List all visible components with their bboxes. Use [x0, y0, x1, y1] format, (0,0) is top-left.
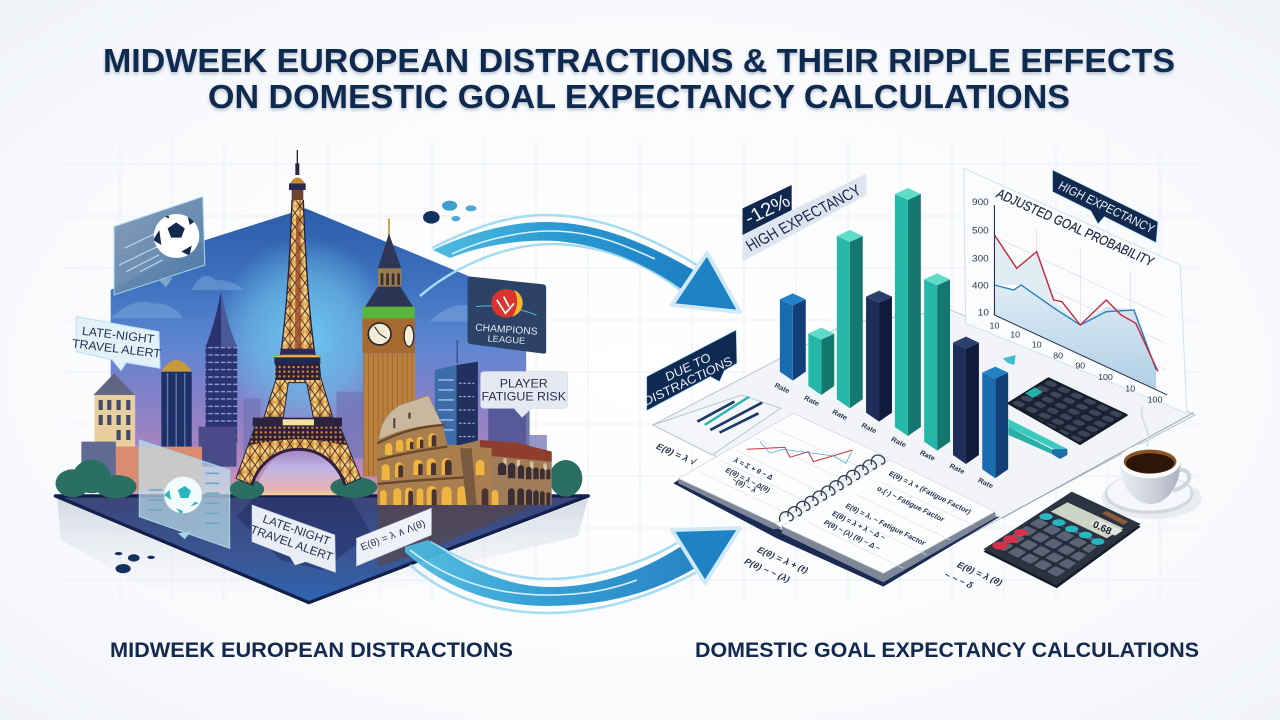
desk front edge — [1002, 413, 1193, 518]
panel: European landmarks illustration — [56, 150, 588, 607]
chart title: ADJUSTED GOAL PROBABILITY — [994, 186, 1157, 269]
handwritten formulas — [724, 455, 973, 553]
dark tower with gold dome — [161, 360, 192, 447]
panel: domestic goal expectancy desk illustration — [641, 168, 1202, 591]
formula notes on desk: E(θ) = λ + (t) — [756, 545, 810, 575]
bar axis labels — [773, 382, 994, 490]
formula notes on desk: P(θ) ~ ~ (λ) — [743, 556, 791, 584]
handwritten formulas: λ = Σ + θ ~ Δ — [732, 455, 774, 482]
notebook mini line chart — [747, 447, 853, 462]
bar axis labels: Rate — [860, 422, 878, 435]
x axis labels: 100 — [1148, 395, 1163, 405]
right ruined section — [453, 440, 552, 505]
x axis labels: 10 — [1125, 384, 1136, 393]
callout: late-night travel alert lower — [248, 505, 340, 572]
title: ON DOMESTIC GOAL EXPECTANCY CALCULATIONS — [208, 78, 1070, 115]
callout: -12% high expectancy — [741, 173, 866, 262]
arrow: bottom curved blue arrow — [405, 528, 740, 613]
bar chart — [773, 188, 1008, 490]
dark arch shadows — [398, 435, 488, 505]
floor reflection — [57, 498, 588, 607]
callout: Champions League badge — [468, 277, 546, 354]
card: glass football — [139, 440, 230, 548]
callout: due to distractions: DUE TO — [662, 351, 714, 384]
handwritten formulas: E(θ) = λ₁ ~ Fatigue Factor — [844, 501, 928, 548]
notebook — [673, 413, 1000, 587]
y axis labels: 500 — [972, 226, 989, 236]
bar axis labels: Rate — [918, 450, 936, 462]
callout: late-night travel alert top: LATE-NIGHT — [81, 324, 156, 346]
handwritten formulas: α₁(·) ~ Fatigue Factor — [876, 484, 947, 524]
callout: late-night travel alert lower: TRAVEL ALERT — [248, 522, 335, 564]
calculator — [983, 492, 1141, 588]
arrow: top curved blue arrow — [420, 215, 740, 312]
Eiffel Tower — [236, 150, 361, 485]
card: football motion — [114, 197, 205, 295]
red line — [994, 235, 1158, 372]
callout: Champions League badge: CHAMPIONS — [475, 323, 538, 338]
tag: high expectancy right: HIGH EXPECTANCY — [1056, 178, 1158, 236]
x axis labels: 10 — [1010, 330, 1020, 340]
keypad — [1008, 378, 1127, 444]
callout: late-night travel alert lower: LATE-NIGHT — [261, 512, 332, 548]
formula notes on desk — [655, 441, 1004, 591]
formula card — [357, 508, 431, 566]
caption: left: MIDWEEK EUROPEAN DISTRACTIONS — [110, 639, 513, 662]
teal marker — [1003, 355, 1016, 365]
callout: due to distractions — [641, 330, 737, 411]
callout: late-night travel alert top: TRAVEL ALERT — [71, 337, 162, 361]
y axis labels: 300 — [972, 254, 989, 264]
formula notes on desk: E(θ) = λ (θ) — [955, 560, 1004, 588]
bar axis labels: Rate — [773, 382, 791, 395]
bar axis labels: Rate — [948, 463, 966, 476]
main shell — [377, 395, 492, 505]
callout: player fatigue risk — [481, 372, 568, 417]
y axis labels — [972, 197, 989, 318]
Big Ben — [362, 218, 415, 477]
title — [103, 42, 1175, 115]
callout: player fatigue risk: PLAYER — [500, 376, 548, 390]
handwritten formulas: E(θ) = λ + (Fatigue Factor) — [887, 469, 973, 516]
caption: right: DOMESTIC GOAL EXPECTANCY CALCULATIONS — [695, 639, 1199, 662]
callout: -12% high expectancy: -12% — [741, 190, 794, 229]
y axis labels: 400 — [972, 281, 989, 291]
spiral binding — [780, 455, 885, 522]
desk platform — [653, 310, 1195, 583]
water reflection — [237, 498, 371, 570]
coffee cup — [1102, 407, 1202, 519]
x axis labels: 10 — [1032, 340, 1042, 350]
handwritten formulas: E(θ) = λ ~ Δ(θ) — [724, 465, 772, 495]
small bar card — [653, 395, 781, 455]
clouds — [111, 276, 474, 322]
callout: Champions League badge: LEAGUE — [487, 334, 526, 346]
title: MIDWEEK EUROPEAN DISTRACTIONS & THEIR RIPPLE EFFECTS — [103, 42, 1175, 79]
trees — [56, 460, 582, 499]
calculator: 0.68 — [1091, 519, 1113, 538]
formula card: E(θ) = λ ∧ Λ(θ) — [359, 518, 427, 553]
callout: late-night travel alert top — [71, 317, 164, 371]
axes — [994, 205, 1167, 395]
x axis labels: 10 — [990, 321, 1000, 331]
callout: due to distractions: DISTRACTIONS — [641, 354, 736, 408]
decorative dots top — [423, 201, 477, 224]
blue right tower — [435, 340, 478, 450]
bar axis labels: Rate — [803, 395, 820, 408]
callout: -12% high expectancy: HIGH EXPECTANCY — [742, 181, 865, 255]
x axis labels — [990, 321, 1163, 405]
decorative dots bottom — [115, 552, 155, 573]
area series — [994, 285, 1156, 390]
yellow lit arches — [380, 433, 498, 505]
beige building — [81, 373, 202, 490]
teal ruler — [1008, 419, 1067, 459]
formula notes on desk: ~ ~ ~ δ — [942, 570, 975, 591]
line chart panel — [964, 168, 1187, 413]
x axis labels: 80 — [1053, 351, 1063, 360]
sunset glow under arch — [254, 450, 350, 495]
desk items group — [983, 378, 1202, 588]
handwritten formulas: ~(θ) ~ λ — [731, 475, 758, 495]
skyscraper — [199, 292, 237, 467]
formula notes on desk: E(θ) = λ √ — [655, 441, 698, 467]
handwritten formulas: P(θ) ~ (λ) (θ) ~ Δ ~ — [822, 518, 882, 553]
base platform — [56, 496, 588, 603]
bar axis labels: Rate — [890, 436, 907, 449]
distant towers — [243, 392, 547, 475]
handwritten formulas: E(θ) = λ + λ ~ Δ ~ — [831, 509, 887, 542]
y axis labels: 900 — [972, 197, 989, 208]
Colosseum — [377, 395, 552, 505]
bar axis labels: Rate — [976, 477, 994, 490]
blue line — [994, 285, 1156, 370]
x axis labels: 90 — [1075, 361, 1086, 370]
bar axis labels: Rate — [831, 409, 848, 422]
city sky backdrop — [111, 208, 526, 498]
upper pale area — [994, 235, 1080, 325]
x axis labels: 100 — [1098, 372, 1113, 382]
callout: player fatigue risk: FATIGUE RISK — [482, 390, 566, 404]
y axis labels: 10 — [978, 308, 989, 318]
